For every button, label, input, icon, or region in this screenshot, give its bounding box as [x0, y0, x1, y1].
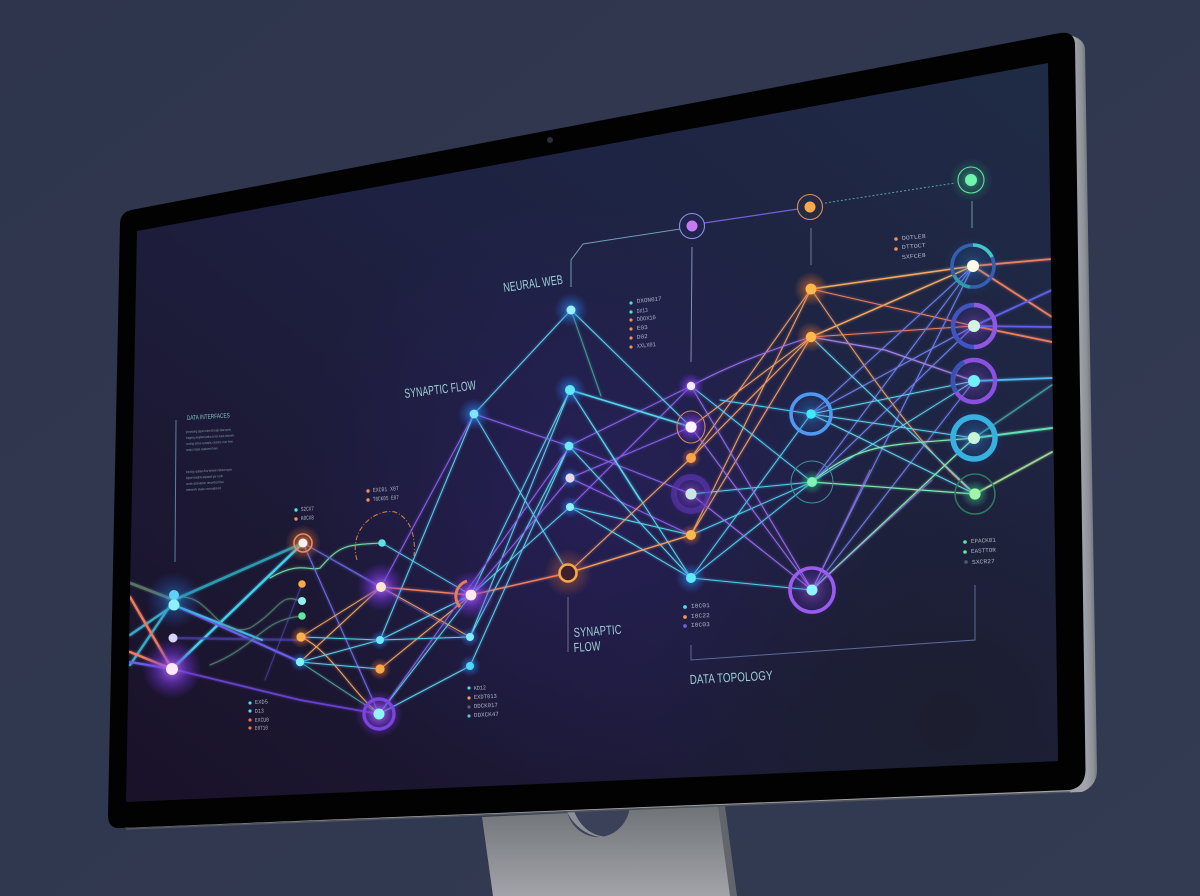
bottom edge of frame — [126, 792, 1070, 829]
network edges — [130, 259, 1052, 714]
legend: near neural web: D02 — [636, 333, 649, 341]
monitor stand — [482, 806, 737, 896]
node column 2 — [285, 525, 321, 672]
legend: above column 3: T0CK05 E07 — [373, 494, 399, 503]
node column 3 — [355, 539, 405, 738]
legend: above column 3: EXC01 X07 — [373, 485, 399, 494]
text block: data interfaces: topology updates flow between hidden layers — [186, 468, 232, 474]
legend: upper right — [894, 234, 926, 259]
legend: below column 2: D13 — [255, 708, 264, 715]
legend: near neural web: DX13 — [636, 307, 648, 315]
node column 7 — [787, 273, 837, 615]
legend: below column 4: EXDT013 — [474, 693, 497, 701]
legend: below column 6: I0C01 — [691, 602, 710, 610]
node column 1 — [142, 572, 202, 699]
legend: lower right: EASTTOR — [971, 547, 996, 555]
legend: below column 6: I0C22 — [691, 612, 710, 620]
heading: data topology: DATA TOPOLOGY — [689, 668, 773, 687]
legend: upper right: DTTOCT — [902, 242, 927, 251]
heading: synaptic flow lower: FLOW — [573, 638, 602, 655]
text block: data interfaces: routing active synaptic clusters over time — [186, 440, 233, 446]
text block: data interfaces — [186, 412, 234, 492]
text block: data interfaces: node activation recorded live — [186, 480, 224, 486]
legend: above column 2: S2CX7 — [301, 505, 314, 513]
heading: synaptic flow lower — [574, 624, 622, 652]
webcam — [547, 137, 553, 143]
legend: upper right: SXFCE8 — [902, 252, 927, 261]
heading: neural web: NEURAL WEB — [502, 272, 564, 295]
heading: synaptic flow lower: SYNAPTIC — [573, 622, 622, 640]
legend: lower right: EPACK01 — [971, 537, 996, 545]
legend: below column 4: DDXCK47 — [474, 711, 499, 719]
legend: below column 2 — [248, 699, 269, 732]
text block: data interfaces: mapping weighted paths across input channels — [186, 433, 234, 440]
legend: below column 2: EXCU0 — [255, 717, 269, 724]
text block: data interfaces: processing signal nodes through data layers — [186, 428, 231, 434]
legend: below column 4 — [467, 684, 499, 719]
screen — [120, 60, 1065, 810]
legend: below column 4: DDCK017 — [474, 702, 498, 710]
legend: near neural web — [629, 295, 662, 350]
legend: lower right: SXCR27 — [972, 558, 995, 566]
node column 4 — [447, 398, 495, 677]
legend: near neural web: E03 — [636, 324, 649, 332]
legend: above column 3 — [366, 486, 398, 502]
monitor black bezel — [108, 33, 1086, 828]
legend: near neural web: XXLX01 — [636, 341, 656, 350]
text block: data interfaces: output state captured here — [186, 446, 218, 452]
legend: near neural web: DXON017 — [636, 295, 662, 305]
top row node: green — [952, 161, 990, 200]
legend: above column 2: K0CX8 — [301, 514, 314, 522]
legend: below column 2: E0T10 — [255, 725, 268, 732]
legend: below column 4: KD12 — [474, 684, 486, 692]
legend: upper right: DOTLE8 — [902, 233, 927, 242]
top row node: purple — [680, 214, 704, 238]
node column 8 — [948, 241, 1000, 515]
legend: below column 6 — [683, 602, 710, 629]
text block: data interfaces: signal weights adjusted per cycle — [186, 474, 223, 480]
legend: below column 6: I0C03 — [691, 621, 710, 629]
legend: near neural web: DDOX10 — [636, 314, 656, 323]
monitor silver frame — [125, 33, 1097, 828]
text block: data interfaces: DATA INTERFACES — [187, 412, 231, 422]
heading: synaptic flow upper: SYNAPTIC FLOW — [404, 377, 477, 401]
node column 5 — [544, 293, 592, 597]
text block: data interfaces: network state normalized — [186, 486, 221, 492]
legend: above column 2 — [294, 506, 314, 521]
legend: lower right — [963, 538, 996, 564]
top row node: orange — [798, 194, 822, 220]
top connector lines — [175, 183, 975, 660]
node column 6 — [670, 374, 712, 592]
legend: below column 2: EXD5 — [255, 699, 268, 706]
